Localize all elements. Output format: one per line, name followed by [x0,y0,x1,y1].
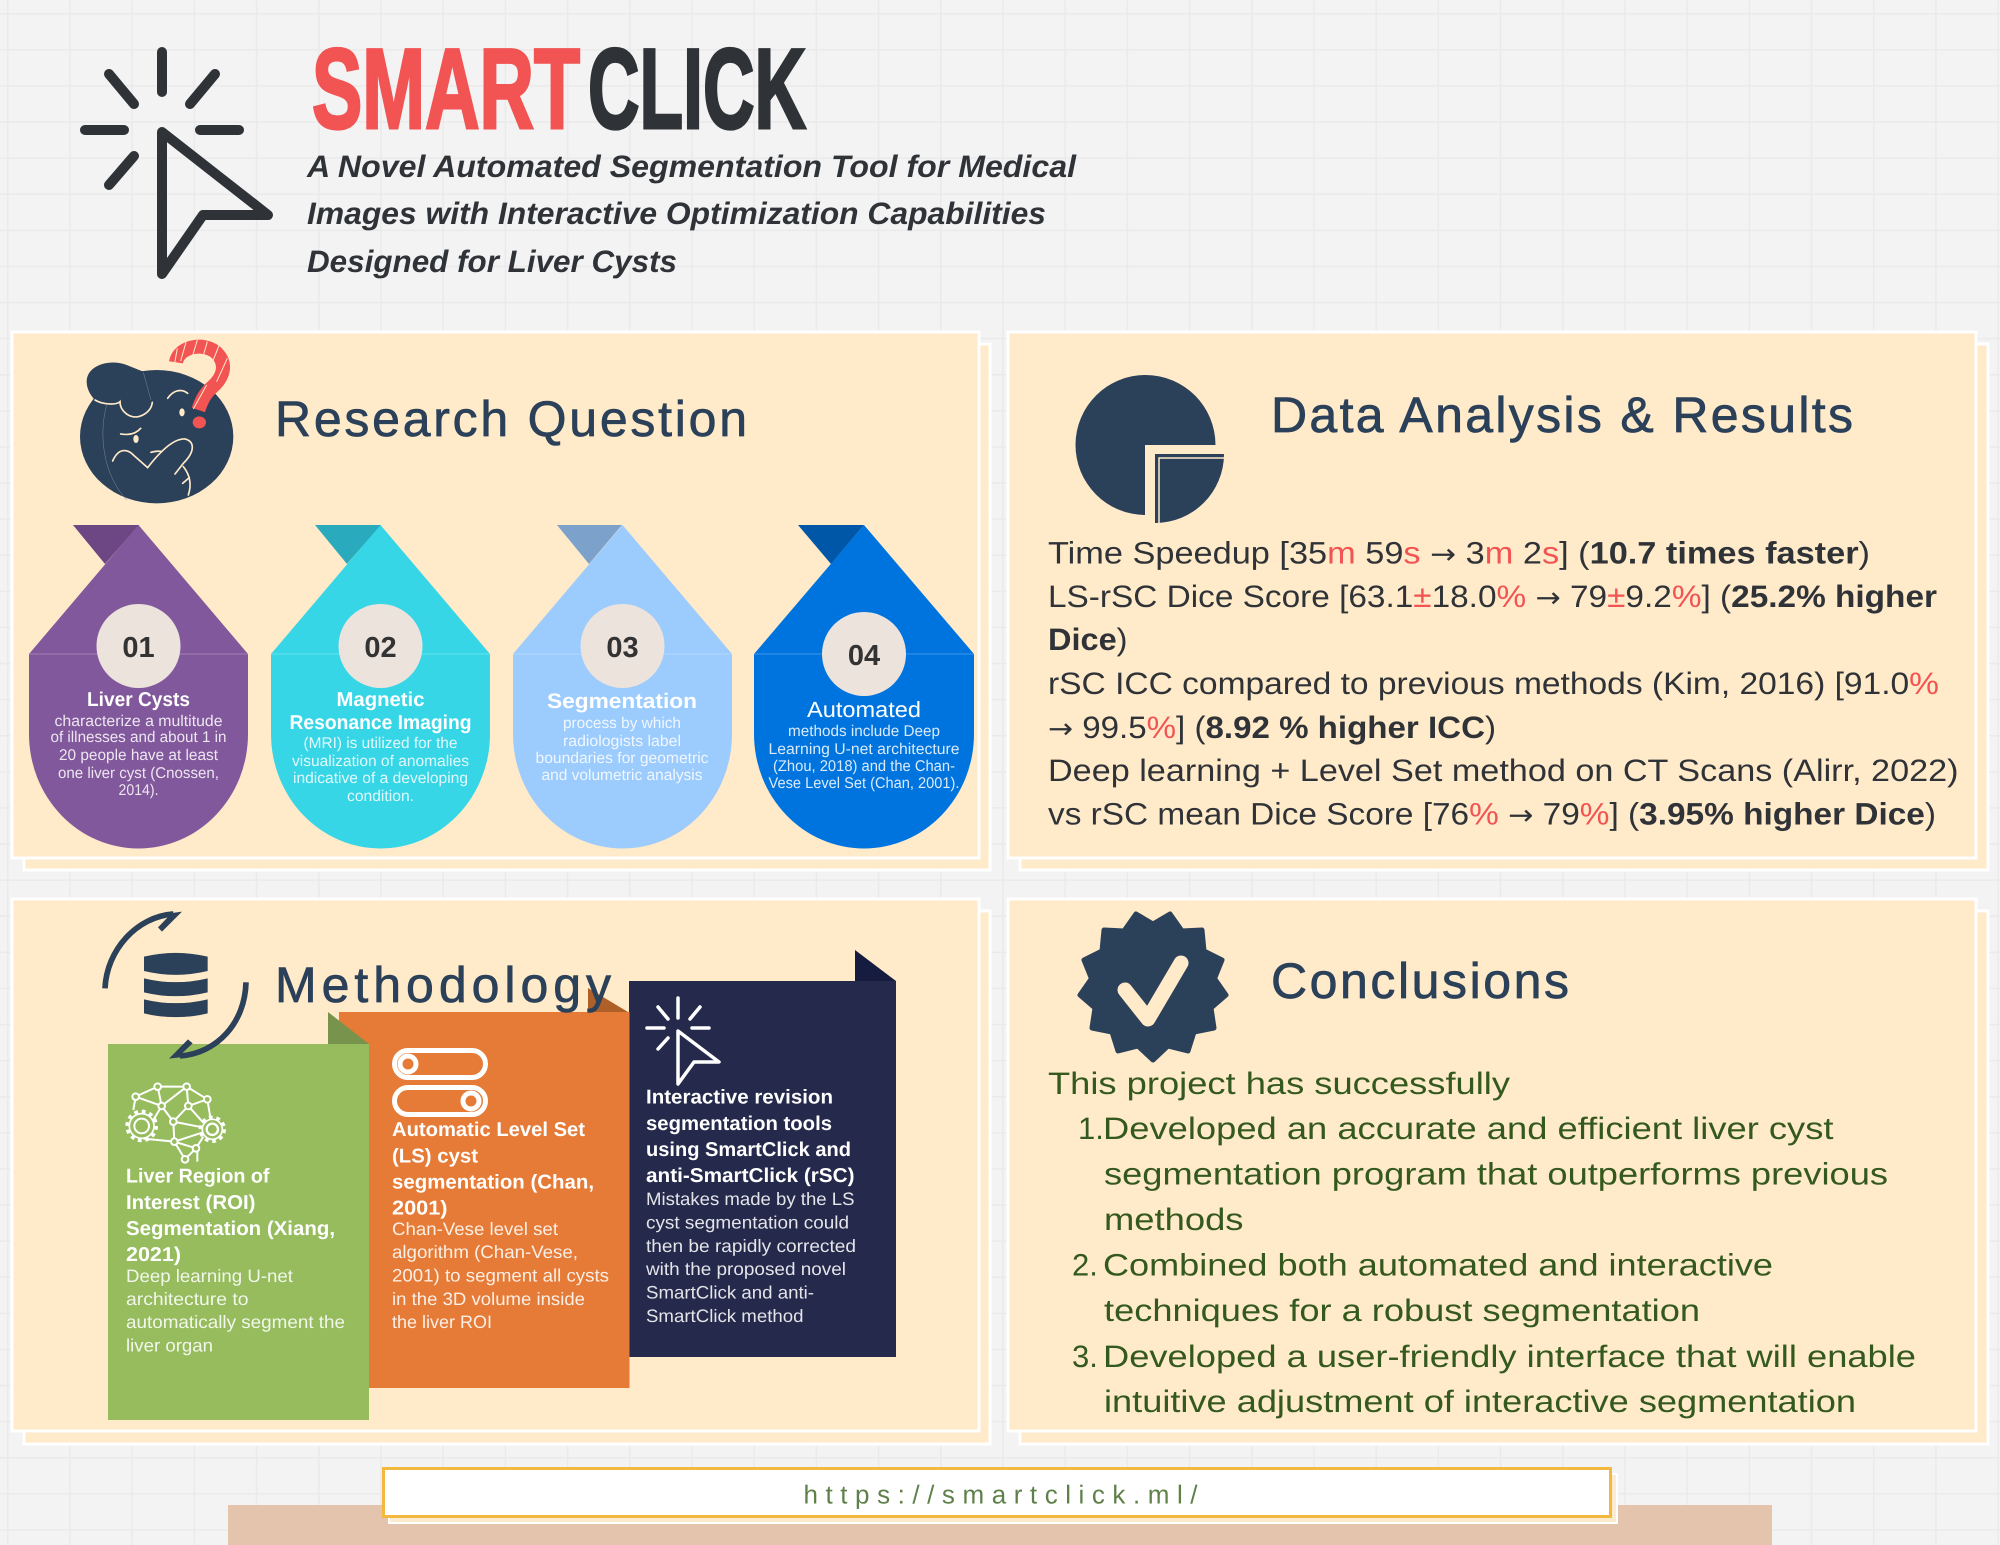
card: automated [754,525,974,848]
card: segmentation: 03 [606,632,639,664]
conclusions text: intuitive adjustment of interactive segmentation [1104,1384,1856,1419]
card: automated: 04 [848,640,880,672]
card: liver roi segmentation: Segmentation (Xiang, [126,1218,335,1240]
icon: thinking person [80,340,233,503]
card: liver cysts: 2014). [118,782,158,799]
card: liver cysts: characterize a multitude [54,713,222,730]
title: CLICK [588,26,806,153]
card: automatic level set: Chan-Vese level set [392,1219,558,1239]
conclusions text: 2. [1072,1248,1098,1282]
card: liver cysts: 20 people have at least [59,747,219,764]
panel: conclusions [1008,899,1988,1444]
panel: data analysis and results [1008,332,1988,870]
url box: https://smartclick.ml/ [804,1480,1198,1510]
card: segmentation [513,525,732,848]
panel: methodology [12,899,990,1444]
card: interactive revision [629,950,896,1357]
card: automatic level set: (LS) cyst [392,1146,478,1168]
title: SMART [312,26,580,153]
card: automated: (Zhou, 2018) and the Chan- [773,758,955,775]
subtitle: A Novel Automated Segmentation Tool for Medical [306,149,1077,184]
conclusions text: This project has successfully [1048,1066,1511,1101]
card: liver roi segmentation: automatically segment the [126,1312,345,1332]
icon: toggles [394,1050,486,1114]
card: liver roi segmentation [108,1012,369,1420]
conclusions text: techniques for a robust segmentation [1104,1293,1700,1328]
results text [1048,536,1958,832]
card: liver roi segmentation: 2021) [126,1244,181,1266]
conclusions text: 1. [1078,1111,1104,1146]
icon: verified badge [1080,914,1226,1060]
card: interactive revision: cyst segmentation could [646,1212,849,1232]
card: magnetic resonance imaging: (MRI) is utilized for the [304,735,458,752]
card: automatic level set [339,988,630,1388]
card: magnetic resonance imaging: visualization of anomalies [292,753,469,770]
card: interactive revision: SmartClick method [646,1306,804,1326]
card: liver roi segmentation: liver organ [126,1336,213,1356]
card: liver cysts: one liver cyst (Cnossen, [58,765,219,782]
conclusions text: Combined both automated and interactive [1103,1248,1773,1282]
card: segmentation: and volumetric analysis [542,767,703,784]
card: interactive revision: segmentation tools [646,1113,832,1135]
conclusions text: methods [1104,1202,1244,1237]
card: automatic level set: the liver ROI [392,1312,492,1332]
card: liver cysts: 01 [122,632,155,664]
results text: Deep learning + Level Set method on CT Scans (Alirr, 2022) [1048,753,1958,788]
results text: vs rSC mean Dice Score [76 % → 79%] (3.95% higher Dice ) [1048,796,1936,832]
conclusions text [1048,1066,1916,1419]
results text: → 99.5%] (8.92 % higher ICC ) [1048,710,1496,745]
card: automated: Automated [807,697,921,722]
card: magnetic resonance imaging: 02 [364,632,397,664]
card: automatic level set: 2001) [392,1198,448,1220]
card: liver roi segmentation: Liver Region of [126,1166,270,1188]
card: magnetic resonance imaging [271,525,490,848]
card: automatic level set: 2001) to segment all cysts [392,1266,609,1286]
conclusions text: 3. [1072,1339,1098,1374]
subtitle [306,149,1077,279]
card: automated: Learning U-net architecture [768,741,960,758]
card: magnetic resonance imaging: Magnetic [336,689,424,711]
card: interactive revision: using SmartClick and [646,1139,851,1161]
card: segmentation: Segmentation [547,690,697,713]
footer bar [228,1505,1772,1545]
heading: data analysis and results: Data Analysis & Results [1271,387,1853,443]
panel: research question [12,332,990,870]
card: automated: Vese Level Set (Chan, 2001). [768,775,960,792]
card: interactive revision: with the proposed novel [645,1259,846,1279]
conclusions text: Developed a user-friendly interface that will enable [1103,1339,1916,1374]
card: magnetic resonance imaging: Resonance Imaging [290,712,472,734]
card: liver cysts: of illnesses and about 1 in [50,729,226,746]
card: segmentation: boundaries for geometric [536,750,709,767]
subtitle: Designed for Liver Cysts [307,244,677,279]
card: interactive revision: then be rapidly corrected [646,1236,856,1256]
card: interactive revision: Interactive revision [646,1086,833,1108]
heading: conclusions: Conclusions [1271,953,1569,1009]
card: liver roi segmentation: architecture to [126,1289,248,1309]
icon: brain network [127,1083,224,1163]
card: segmentation: radiologists label [563,733,681,750]
card: segmentation: process by which [563,715,681,732]
card: automatic level set: segmentation (Chan, [392,1172,594,1194]
card: liver cysts: Liver Cysts [87,689,190,711]
results text: Dice) [1048,622,1128,657]
card: automatic level set: in the 3D volume inside [392,1289,585,1309]
url box [384,1468,1617,1523]
card: automatic level set: algorithm (Chan-Vese, [392,1242,578,1262]
card: automated: methods include Deep [788,723,940,740]
icon: click cursor logo [85,52,268,274]
card: liver roi segmentation: Interest (ROI) [126,1192,256,1214]
card: interactive revision: anti-SmartClick (rSC) [646,1165,854,1187]
card: magnetic resonance imaging: indicative of a developing [293,770,468,787]
conclusions text: Developed an accurate and efficient liver cyst [1103,1111,1834,1146]
heading: research question: Research Question [275,391,747,447]
icon: white cursor [647,998,719,1084]
card: interactive revision: SmartClick and anti- [646,1282,814,1302]
conclusions text: segmentation program that outperforms previous [1104,1156,1888,1192]
heading: methodology: Methodology [275,957,611,1013]
results text: Time Speedup [35 m 59s → 3m 2s] (10.7 times faster ) [1048,536,1870,570]
card: interactive revision: Mistakes made by the LS [646,1189,854,1209]
card: liver cysts [29,525,248,848]
icon: database with refresh arrows [105,912,246,1059]
icon: pie chart [1076,375,1224,523]
results text: rSC ICC compared to previous methods (Kim, 2016) [91.0 % [1048,666,1939,701]
card: liver roi segmentation: Deep learning U-net [126,1266,293,1286]
subtitle: Images with Interactive Optimization Capabilities [307,196,1046,231]
card: magnetic resonance imaging: condition. [347,788,414,805]
results text: LS-rSC Dice Score [63.1 ±18.0% → 79±9.2%] (25.2% higher [1048,579,1937,614]
card: automatic level set: Automatic Level Set [392,1119,585,1141]
